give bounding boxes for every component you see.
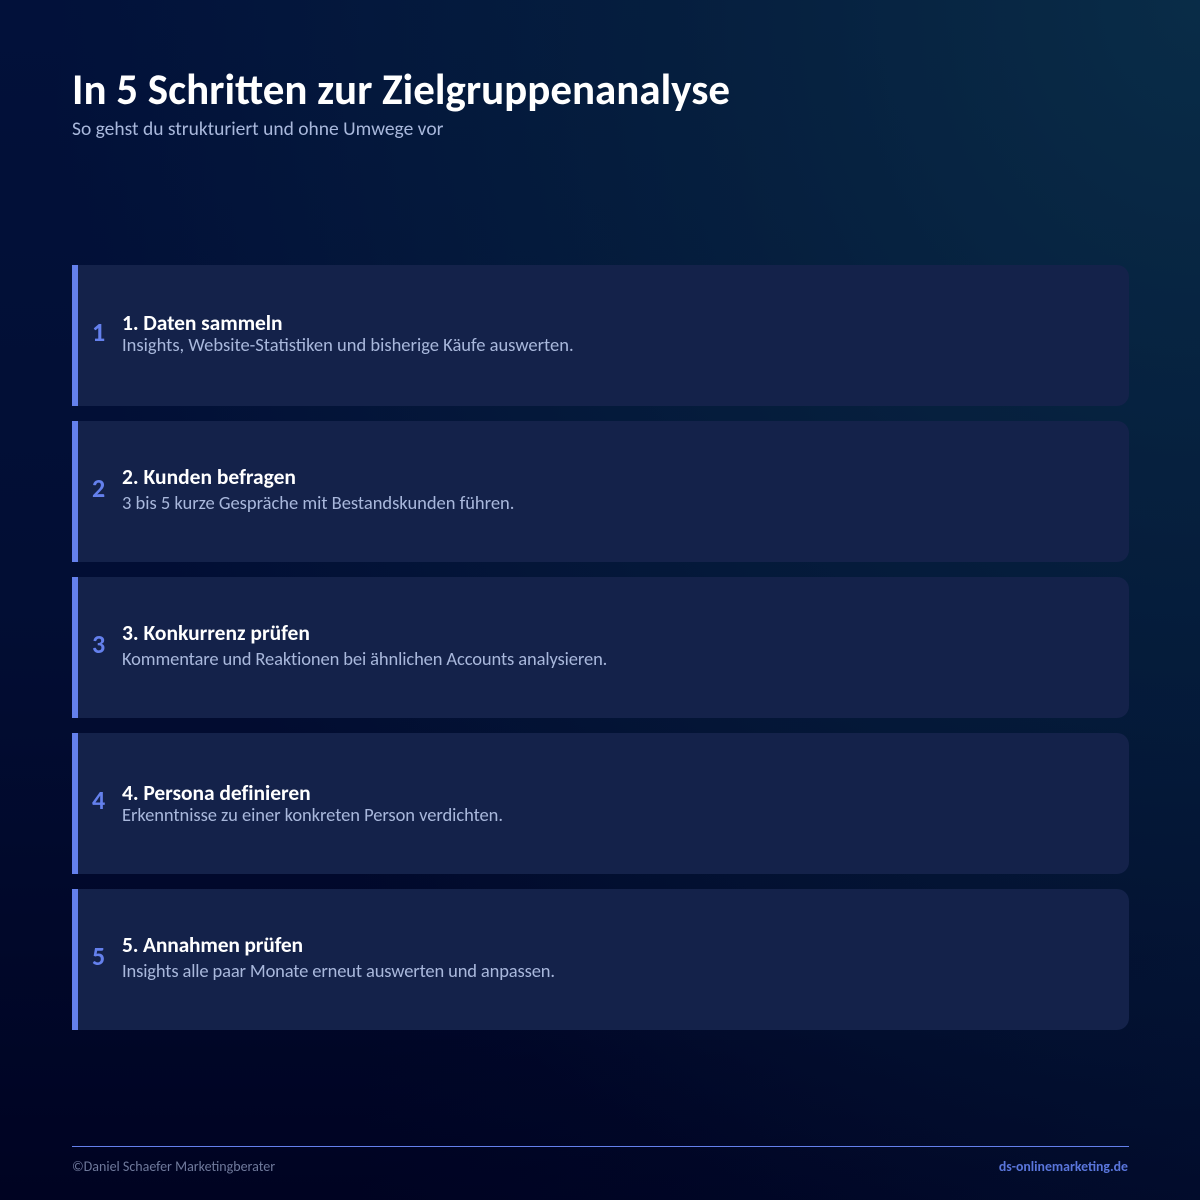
step 5 heading: 5. Annahmen prüfen bbox=[122, 932, 303, 958]
step 1 text: Insights, Website-Statistiken und bisherige Käufe auswerten. bbox=[122, 333, 574, 356]
step 1 number: 1 bbox=[92, 316, 105, 348]
subtitle: So gehst du strukturiert und ohne Umwege vor bbox=[72, 117, 443, 141]
footer website: ds-onlinemarketing.de bbox=[999, 1158, 1128, 1175]
panel: step 2 bbox=[72, 421, 1129, 562]
step 5 number: 5 bbox=[92, 940, 105, 972]
footer rule bbox=[72, 1146, 1129, 1147]
step 1 heading: 1. Daten sammeln bbox=[122, 310, 282, 336]
title: In 5 Schritten zur Zielgruppenanalyse bbox=[72, 63, 730, 116]
step 4 number: 4 bbox=[92, 784, 105, 816]
step 3 text: Kommentare und Reaktionen bei ähnlichen Accounts analysieren. bbox=[122, 647, 607, 670]
footer copyright: ©Daniel Schaefer Marketingberater bbox=[72, 1158, 275, 1175]
step 2 number: 2 bbox=[92, 472, 105, 504]
step 2 text: 3 bis 5 kurze Gespräche mit Bestandskunden führen. bbox=[122, 491, 514, 514]
panel: step 5 bbox=[72, 889, 1129, 1030]
panel: step 1 bbox=[72, 265, 1129, 406]
step 3 number: 3 bbox=[92, 628, 105, 660]
step 2 heading: 2. Kunden befragen bbox=[122, 464, 296, 490]
step 5 text: Insights alle paar Monate erneut auswerten und anpassen. bbox=[122, 959, 555, 982]
step 3 heading: 3. Konkurrenz prüfen bbox=[122, 620, 310, 646]
step 4 heading: 4. Persona definieren bbox=[122, 780, 311, 806]
step 4 text: Erkenntnisse zu einer konkreten Person verdichten. bbox=[122, 803, 503, 826]
panel: step 3 bbox=[72, 577, 1129, 718]
panel: step 4 bbox=[72, 733, 1129, 874]
